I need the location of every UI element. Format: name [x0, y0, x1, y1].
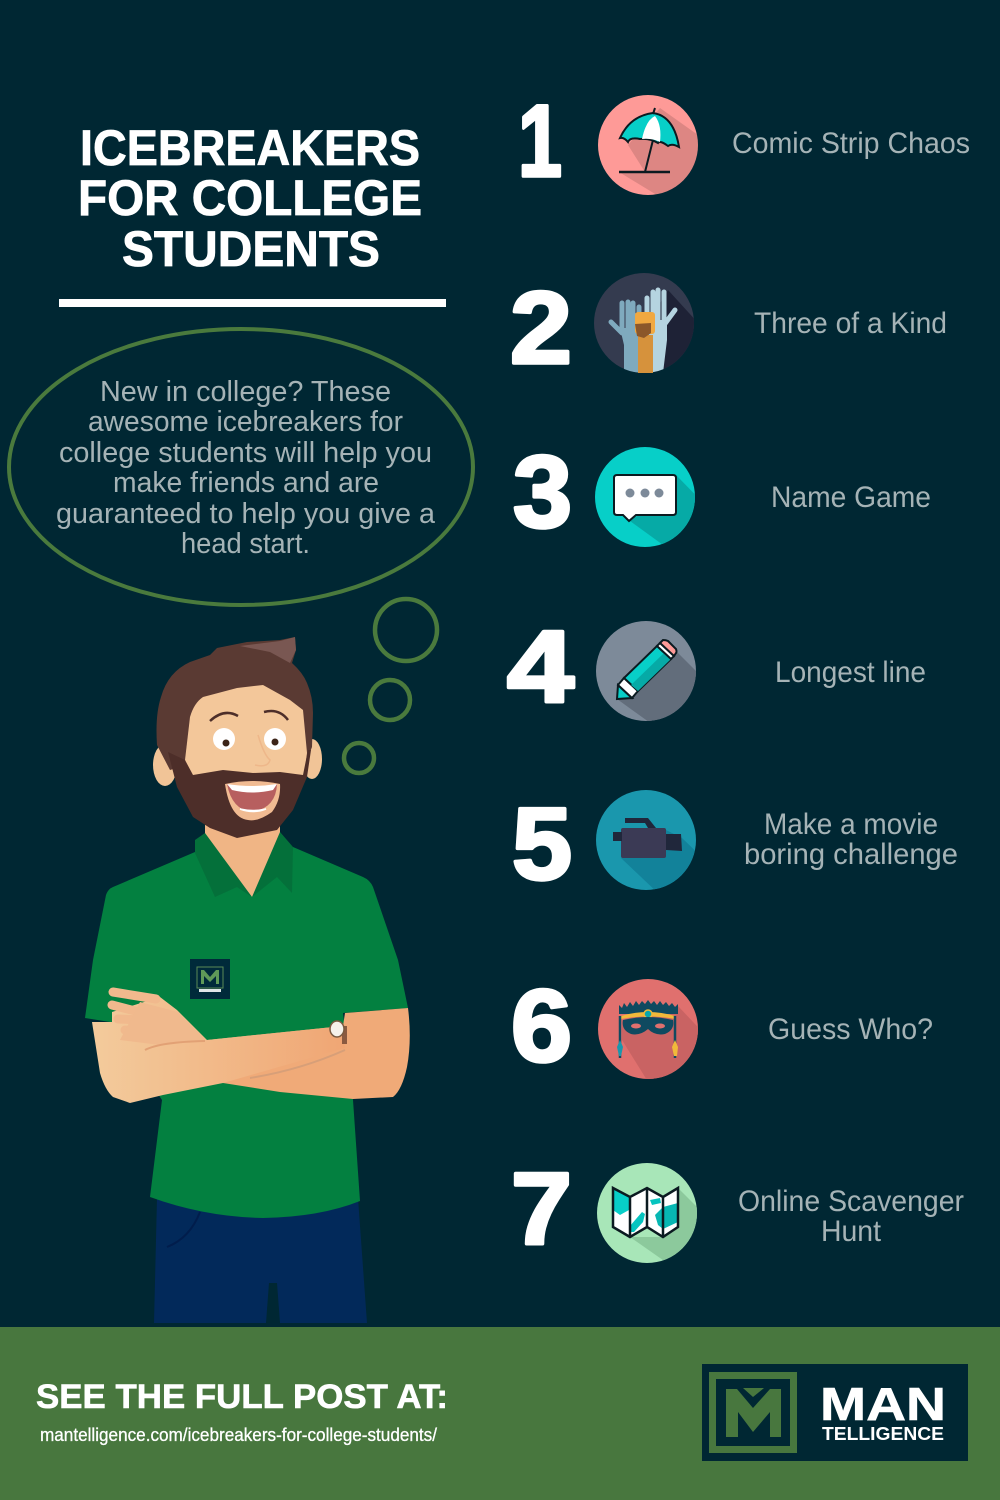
icon: raised hands	[594, 273, 694, 373]
label: Make a movie boring challenge: boring challenge	[744, 838, 958, 871]
item 2	[512, 273, 946, 373]
label: Online Scavenger Hunt: Online Scavenger	[738, 1185, 964, 1218]
label: Name Game: Name Game	[771, 481, 931, 514]
eyes and brows	[210, 711, 288, 766]
item 4	[506, 621, 925, 721]
footer call to action: SEE THE FULL POST AT:	[36, 1378, 448, 1416]
item 6	[513, 979, 932, 1079]
number 4: 4	[507, 610, 574, 724]
shirt	[85, 847, 408, 1218]
icon: folded map	[597, 1163, 697, 1263]
number 7: 7	[511, 1152, 572, 1266]
item 7	[514, 1163, 964, 1263]
number 3: 3	[513, 435, 572, 549]
title	[78, 120, 422, 277]
item 5	[513, 790, 957, 890]
number 6: 6	[511, 969, 572, 1083]
logo: TELLIGENCE	[822, 1424, 944, 1444]
icon: pencil	[596, 621, 696, 721]
number 5: 5	[512, 787, 572, 901]
icon: speech bubble	[595, 447, 695, 547]
trousers	[154, 1198, 367, 1323]
footer band	[0, 1327, 1000, 1500]
intro text: head start.	[181, 528, 310, 560]
ears	[153, 744, 177, 786]
number 2: 2	[510, 271, 572, 385]
number 1: 1	[518, 84, 562, 198]
icon: video camera	[596, 790, 696, 890]
intro text: guaranteed to help you give a	[56, 498, 436, 530]
neck	[205, 820, 280, 897]
crossed arms	[92, 992, 410, 1103]
intro text	[56, 376, 436, 560]
label: Online Scavenger Hunt	[738, 1185, 964, 1248]
icon: carnival mask	[598, 979, 698, 1079]
shirt badge	[190, 959, 230, 999]
title: FOR COLLEGE	[78, 170, 422, 226]
wristwatch	[330, 1021, 347, 1044]
icon: umbrella	[598, 95, 698, 195]
logo	[702, 1364, 968, 1461]
label: Longest line: Longest line	[775, 656, 926, 689]
title: ICEBREAKERS	[80, 120, 420, 176]
intro text: make friends and are	[113, 467, 379, 499]
label: Make a movie boring challenge: Make a movie	[764, 808, 938, 841]
mouth	[225, 781, 280, 820]
item 3	[514, 447, 930, 547]
right hand	[645, 290, 675, 373]
intro text: college students will help you	[59, 437, 432, 469]
label: Make a movie boring challenge	[744, 808, 958, 871]
logo: MAN	[820, 1378, 946, 1430]
collar	[195, 832, 293, 897]
beard	[168, 750, 311, 838]
hair	[156, 637, 313, 770]
title: STUDENTS	[122, 221, 380, 277]
thought bubble	[9, 329, 473, 773]
intro text: awesome icebreakers for	[88, 406, 403, 438]
item 1	[522, 95, 969, 195]
face	[185, 685, 307, 790]
character illustration	[85, 637, 410, 1323]
footer url: mantelligence.com/icebreakers-for-college-students/	[40, 1425, 437, 1445]
label: Three of a Kind: Three of a Kind	[754, 307, 947, 340]
left hand	[611, 302, 641, 373]
intro text: New in college? These	[100, 376, 391, 408]
label: Online Scavenger Hunt: Hunt	[821, 1215, 882, 1248]
label: Comic Strip Chaos: Comic Strip Chaos	[732, 127, 970, 160]
label: Guess Who?: Guess Who?	[768, 1013, 933, 1046]
